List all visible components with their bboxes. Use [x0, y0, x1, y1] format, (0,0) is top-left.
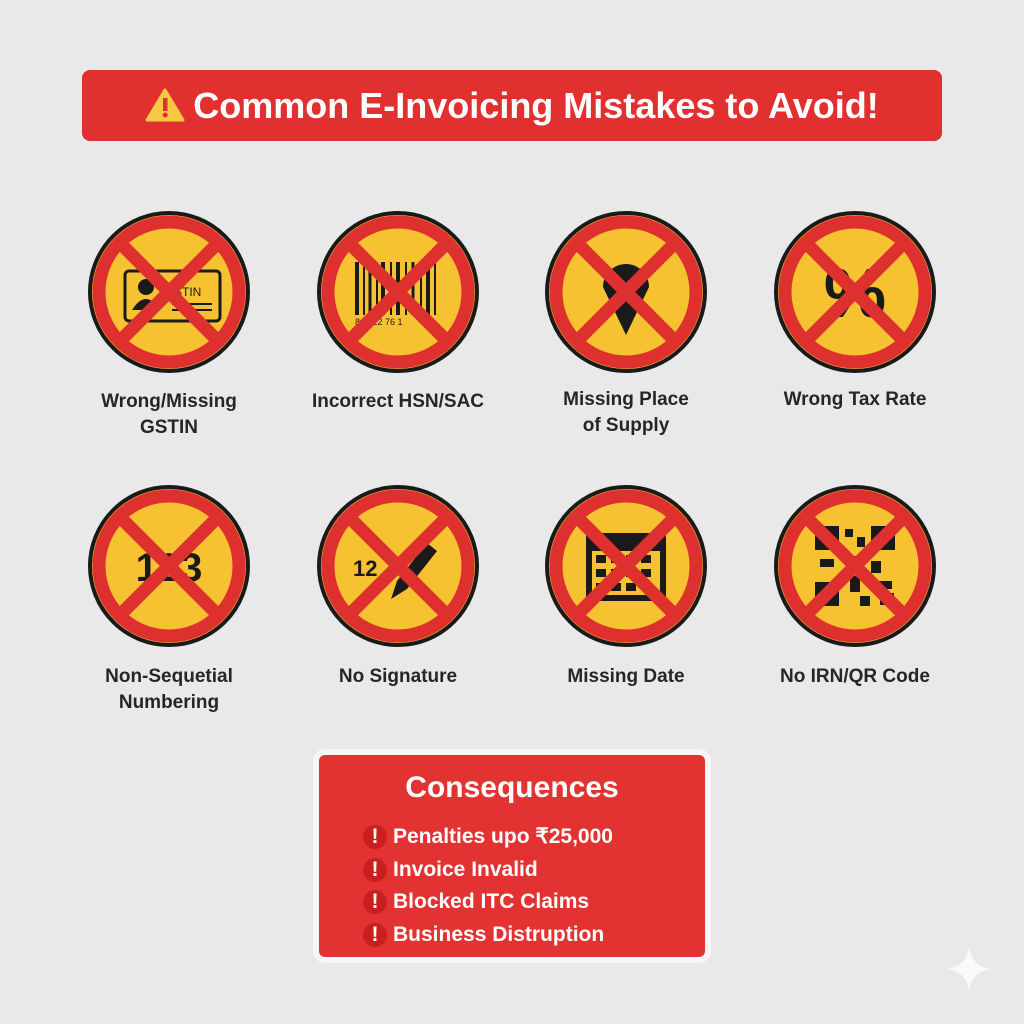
list: Invoice Invalid: [393, 858, 538, 880]
icon: barcode: [317, 211, 479, 373]
label: Wrong/Missing: [101, 391, 237, 412]
label: Non-Sequetial: [105, 666, 233, 687]
title: Common E-Invoicing Mistakes to Avoid!: [193, 85, 879, 126]
label: Missing Date: [567, 666, 685, 687]
list: Blocked ITC Claims: [393, 890, 589, 913]
label: Numbering: [119, 692, 219, 713]
label: [563, 389, 689, 436]
list: [363, 825, 613, 947]
list: !: [372, 825, 378, 848]
icon: QR code: [774, 485, 936, 647]
label: GSTIN: [140, 417, 198, 438]
title: [82, 70, 942, 141]
list: !: [372, 858, 378, 880]
label: Incorrect HSN/SAC: [312, 391, 484, 412]
icon: location pin: [545, 211, 707, 373]
label: Wrong Tax Rate: [784, 389, 926, 410]
icon: pen: 12: [353, 556, 377, 581]
icon: GSTIN card: [88, 211, 250, 373]
icon: 123: 123: [136, 546, 202, 590]
label: No IRN/QR Code: [780, 666, 930, 687]
icon: 123: [88, 485, 250, 647]
panel: consequences: [313, 749, 711, 963]
list: !: [372, 922, 378, 946]
icon: percent: [774, 211, 936, 373]
icon: calendar: [545, 485, 707, 647]
list: !: [372, 890, 378, 913]
list: Penalties upo ₹25,000: [393, 825, 613, 848]
label: [105, 666, 233, 713]
heading: Consequences: [405, 771, 619, 804]
icon: percent: %: [824, 254, 886, 332]
label: of Supply: [583, 415, 669, 436]
list: Business Distruption: [393, 922, 604, 946]
icon: pen: [317, 485, 479, 647]
label: No Signature: [339, 666, 457, 687]
icon: barcode: 8 1722 76 1: [355, 317, 403, 327]
icon: sparkle: [948, 948, 990, 990]
label: [101, 391, 237, 438]
label: Missing Place: [563, 389, 689, 410]
icon: GSTIN card: STIN: [174, 285, 201, 299]
